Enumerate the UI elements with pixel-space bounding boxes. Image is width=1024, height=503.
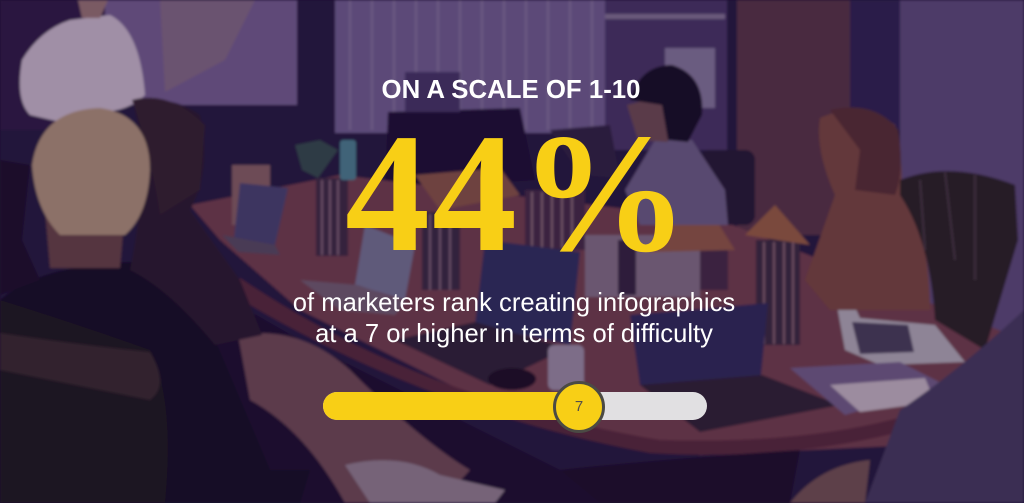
description text — [293, 289, 735, 348]
bottle and mouse — [548, 345, 584, 390]
person front left: head and neck — [45, 210, 125, 268]
laptops — [234, 183, 288, 245]
right chair — [900, 171, 1018, 350]
dark podium behind text — [385, 108, 535, 190]
description text: of marketers rank creating infographics — [293, 289, 735, 317]
table — [190, 175, 1024, 455]
chairs center back — [550, 125, 620, 178]
papers & gift bags — [232, 165, 810, 345]
front leather chair — [0, 300, 168, 503]
heading: on a scale of 1-10: ON A SCALE OF 1-10 — [382, 76, 640, 104]
back wall — [0, 0, 105, 130]
presenter — [20, 15, 145, 122]
orange-lit leg / arm — [238, 333, 470, 503]
big statistic: 44%: 44% — [345, 99, 691, 287]
plant and bottle — [295, 140, 338, 178]
woman behind — [130, 101, 262, 345]
description text: at a 7 or higher in terms of difficulty — [315, 320, 713, 348]
man center right — [625, 140, 728, 225]
slider: difficulty scale — [323, 381, 707, 433]
shoes — [345, 460, 505, 503]
slider fill — [323, 392, 573, 420]
left chair — [0, 160, 40, 295]
slider knob with value 7 — [553, 381, 605, 433]
bottom right person — [865, 310, 1024, 503]
chair behind man — [700, 150, 755, 225]
woman right — [805, 110, 930, 310]
dark floor under table — [560, 450, 800, 503]
person front left: back of body — [0, 262, 310, 503]
slider knob with value 7: 7 — [575, 398, 583, 415]
slider track — [323, 392, 707, 420]
